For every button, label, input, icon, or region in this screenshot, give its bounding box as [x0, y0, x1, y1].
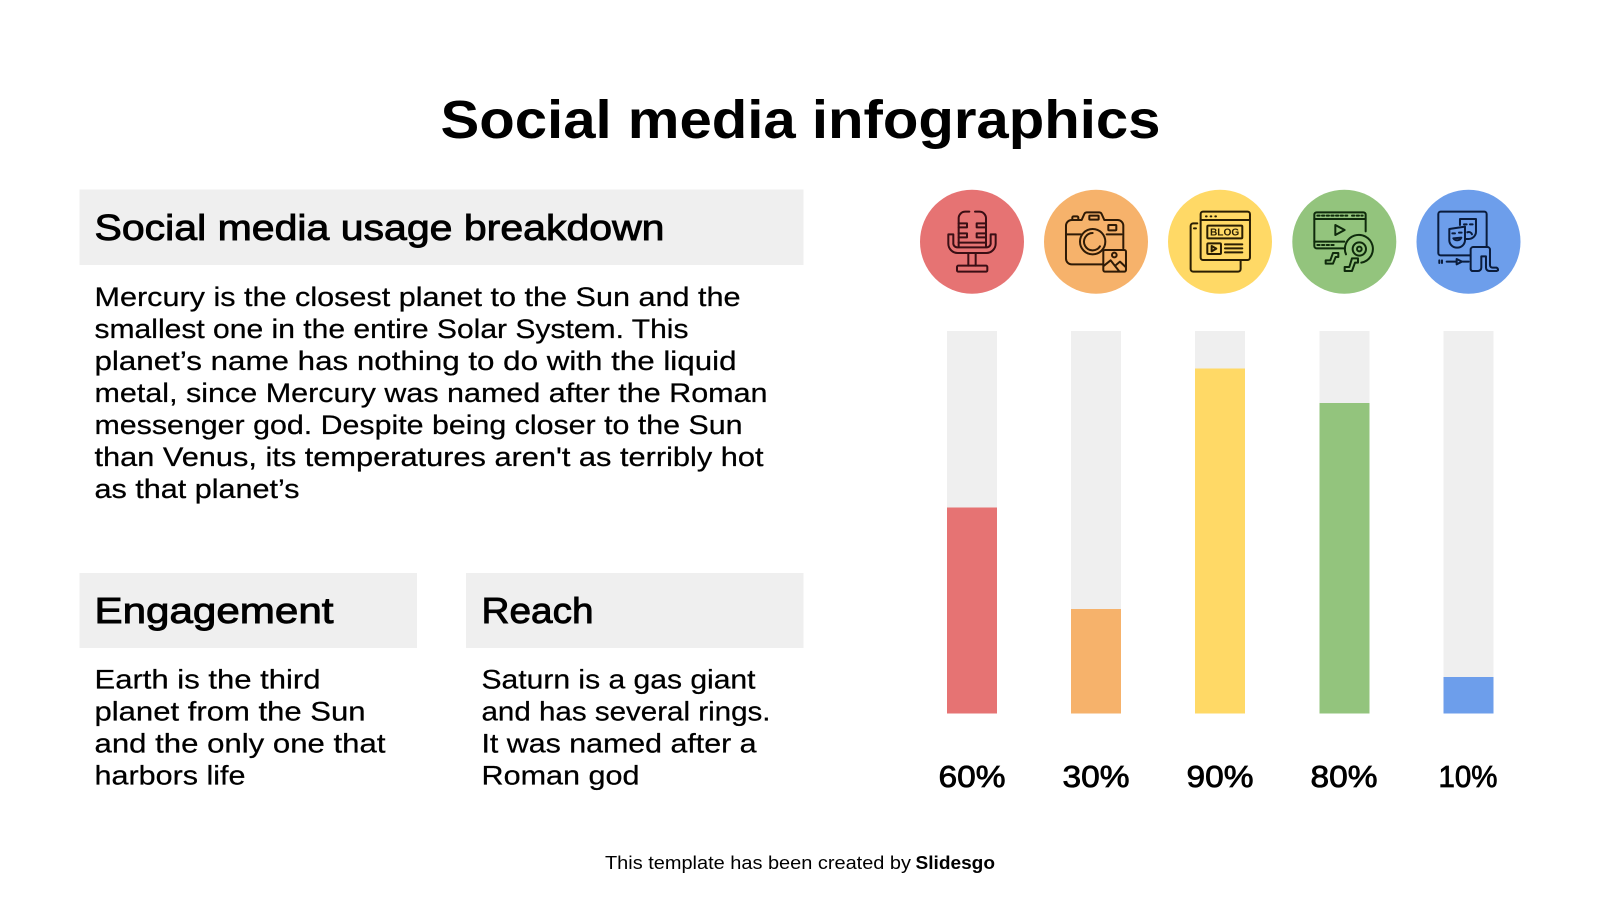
panel: social media usage breakdown	[80, 190, 804, 504]
text block: Mercury description: than Venus, its temperatures aren't as terribly hot	[94, 442, 764, 472]
bar: 30% orange	[1071, 331, 1121, 714]
text block: Mercury description: Mercury is the closest planet to the Sun and the	[94, 282, 740, 312]
text block: Saturn description: and has several rings.	[482, 696, 770, 726]
percentage labels: 60%	[938, 759, 1006, 794]
percentage labels: 10%	[1438, 759, 1498, 794]
bar: 10% blue	[1444, 331, 1494, 714]
percentage labels: 90%	[1186, 759, 1254, 794]
bar: 90% yellow	[1195, 331, 1245, 714]
text block: Earth description: Earth is the third	[94, 664, 320, 694]
text block: Mercury description: smallest one in the entire Solar System. This	[94, 314, 688, 344]
heading bar: engagement	[80, 573, 417, 648]
heading bar: usage breakdown	[80, 190, 804, 265]
heading bar: usage breakdown: Social media usage breakdown	[94, 207, 664, 248]
percentage labels: 30%	[1062, 759, 1130, 794]
heading bar: engagement: Engagement	[94, 590, 334, 631]
text block: Mercury description: messenger god. Despite being closer to the Sun	[94, 410, 742, 440]
text block: Earth description: planet from the Sun	[94, 696, 366, 726]
heading bar: reach: Reach	[482, 590, 594, 631]
icon: camera on orange circle	[1044, 190, 1148, 294]
icon: blog window on yellow circle: BLOG	[1210, 227, 1239, 238]
text block: Saturn description: Roman god	[482, 760, 640, 790]
icon: theatre masks on blue circle	[1416, 190, 1520, 294]
percentage labels	[938, 759, 1498, 794]
text block: Mercury description	[94, 282, 768, 504]
text block: Saturn description	[482, 664, 770, 790]
panel: reach	[466, 573, 804, 790]
icon: blog window on yellow circle	[1168, 190, 1272, 294]
percentage labels: 80%	[1310, 759, 1378, 794]
panel: engagement	[80, 573, 417, 790]
bar chart	[947, 331, 1494, 714]
text block: Saturn description: Saturn is a gas giant	[482, 664, 756, 694]
text block: Mercury description: as that planet’s	[94, 474, 300, 504]
text block: Saturn description: It was named after a	[482, 728, 757, 758]
text block: Mercury description: metal, since Mercury was named after the Roman	[94, 378, 768, 408]
footer credit: This template has been created by	[605, 852, 912, 873]
text block: Earth description: harbors life	[94, 760, 246, 790]
text block: Earth description	[94, 664, 386, 790]
footer credit: Slidesgo	[916, 852, 995, 873]
bar: 60% red	[947, 331, 997, 714]
icon: video and disc on green circle	[1292, 190, 1396, 294]
text block: Mercury description: planet’s name has nothing to do with the liquid	[94, 346, 736, 376]
title: Social media infographics	[440, 90, 1160, 150]
icon: microphone on red circle	[920, 190, 1024, 294]
heading bar: reach	[466, 573, 804, 648]
bar: 80% green	[1320, 331, 1370, 714]
text block: Earth description: and the only one that	[94, 728, 386, 758]
